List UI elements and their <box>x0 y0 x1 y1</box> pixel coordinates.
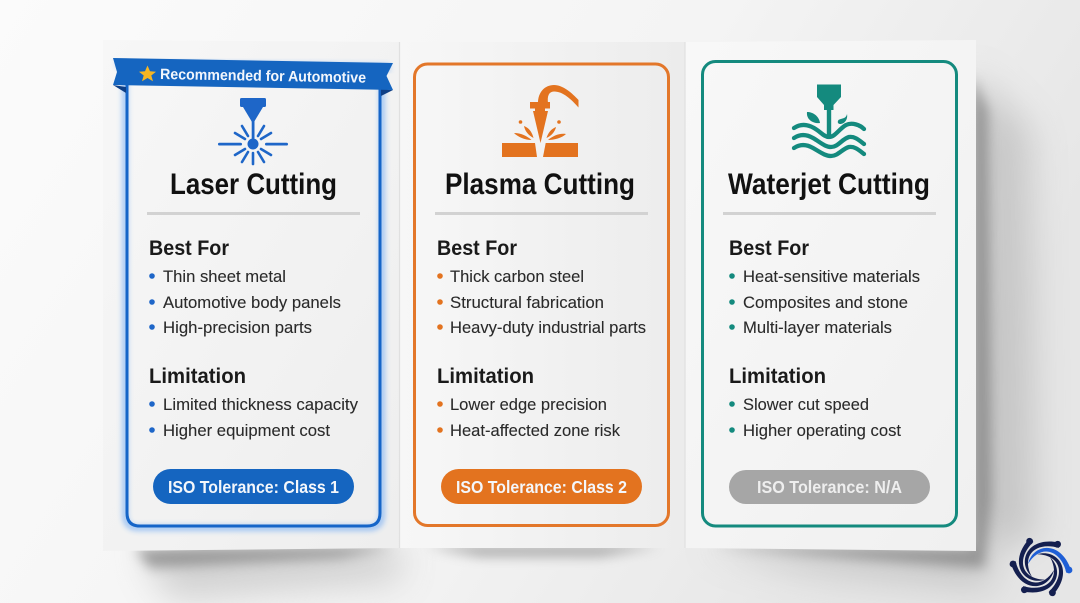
best for: Thick carbon steel <box>450 267 584 286</box>
panel: plasma cutting <box>414 64 668 526</box>
card border <box>702 62 956 526</box>
tolerance pill: ISO Tolerance: Class 2 <box>456 477 627 497</box>
tolerance pill: ISO Tolerance: Class 1 <box>168 477 339 497</box>
tolerance pill <box>441 469 642 504</box>
limitation: Heat-affected zone risk <box>450 421 620 440</box>
limitation <box>149 365 358 440</box>
limitation: Limitation <box>729 365 826 388</box>
best for: Best For <box>729 237 809 260</box>
best for: Best For <box>437 237 517 260</box>
best for: Multi-layer materials <box>743 318 892 337</box>
best for: High-precision parts <box>163 318 312 337</box>
card border <box>127 80 380 526</box>
heading: Plasma Cutting <box>445 168 635 201</box>
best for: Composites and stone <box>743 293 908 312</box>
best for <box>149 237 341 337</box>
ribbon banner <box>113 58 393 90</box>
panel: waterjet cutting <box>702 62 956 526</box>
heading: Laser Cutting <box>170 168 337 201</box>
ribbon folds <box>113 85 393 96</box>
star icon <box>139 66 156 81</box>
divider <box>147 212 360 215</box>
limitation: Higher operating cost <box>743 421 901 440</box>
best for: Best For <box>149 237 229 260</box>
divider <box>723 212 936 215</box>
best for <box>437 237 646 337</box>
panel: laser cutting <box>113 58 393 528</box>
heading: Waterjet Cutting <box>728 168 930 201</box>
icon: plasma torch <box>502 85 578 157</box>
divider <box>435 212 648 215</box>
limitation: Limited thickness capacity <box>163 395 358 414</box>
best for: Automotive body panels <box>163 293 341 312</box>
limitation: Higher equipment cost <box>163 421 330 440</box>
paper shadow <box>135 70 1035 600</box>
tolerance pill <box>153 469 354 504</box>
tolerance pill <box>729 470 930 504</box>
best for <box>729 237 920 337</box>
best for: Thin sheet metal <box>163 267 286 286</box>
limitation: Limitation <box>437 365 534 388</box>
limitation <box>437 365 620 440</box>
card glow <box>125 80 382 528</box>
icon: swirl logo <box>1009 530 1073 603</box>
brochure panels <box>103 40 976 551</box>
best for: Structural fabrication <box>450 293 604 312</box>
icon: laser head <box>218 98 288 164</box>
ribbon text: Recommended for Automotive <box>160 66 366 87</box>
best for: Heat-sensitive materials <box>743 267 920 286</box>
icon: water jet <box>794 84 864 156</box>
card border <box>414 64 668 526</box>
limitation: Limitation <box>149 365 246 388</box>
ribbon glow <box>116 60 390 72</box>
best for: Heavy-duty industrial parts <box>450 318 646 337</box>
limitation <box>729 365 901 440</box>
limitation: Lower edge precision <box>450 395 607 414</box>
limitation: Slower cut speed <box>743 395 869 414</box>
tolerance pill: ISO Tolerance: N/A <box>757 477 902 497</box>
